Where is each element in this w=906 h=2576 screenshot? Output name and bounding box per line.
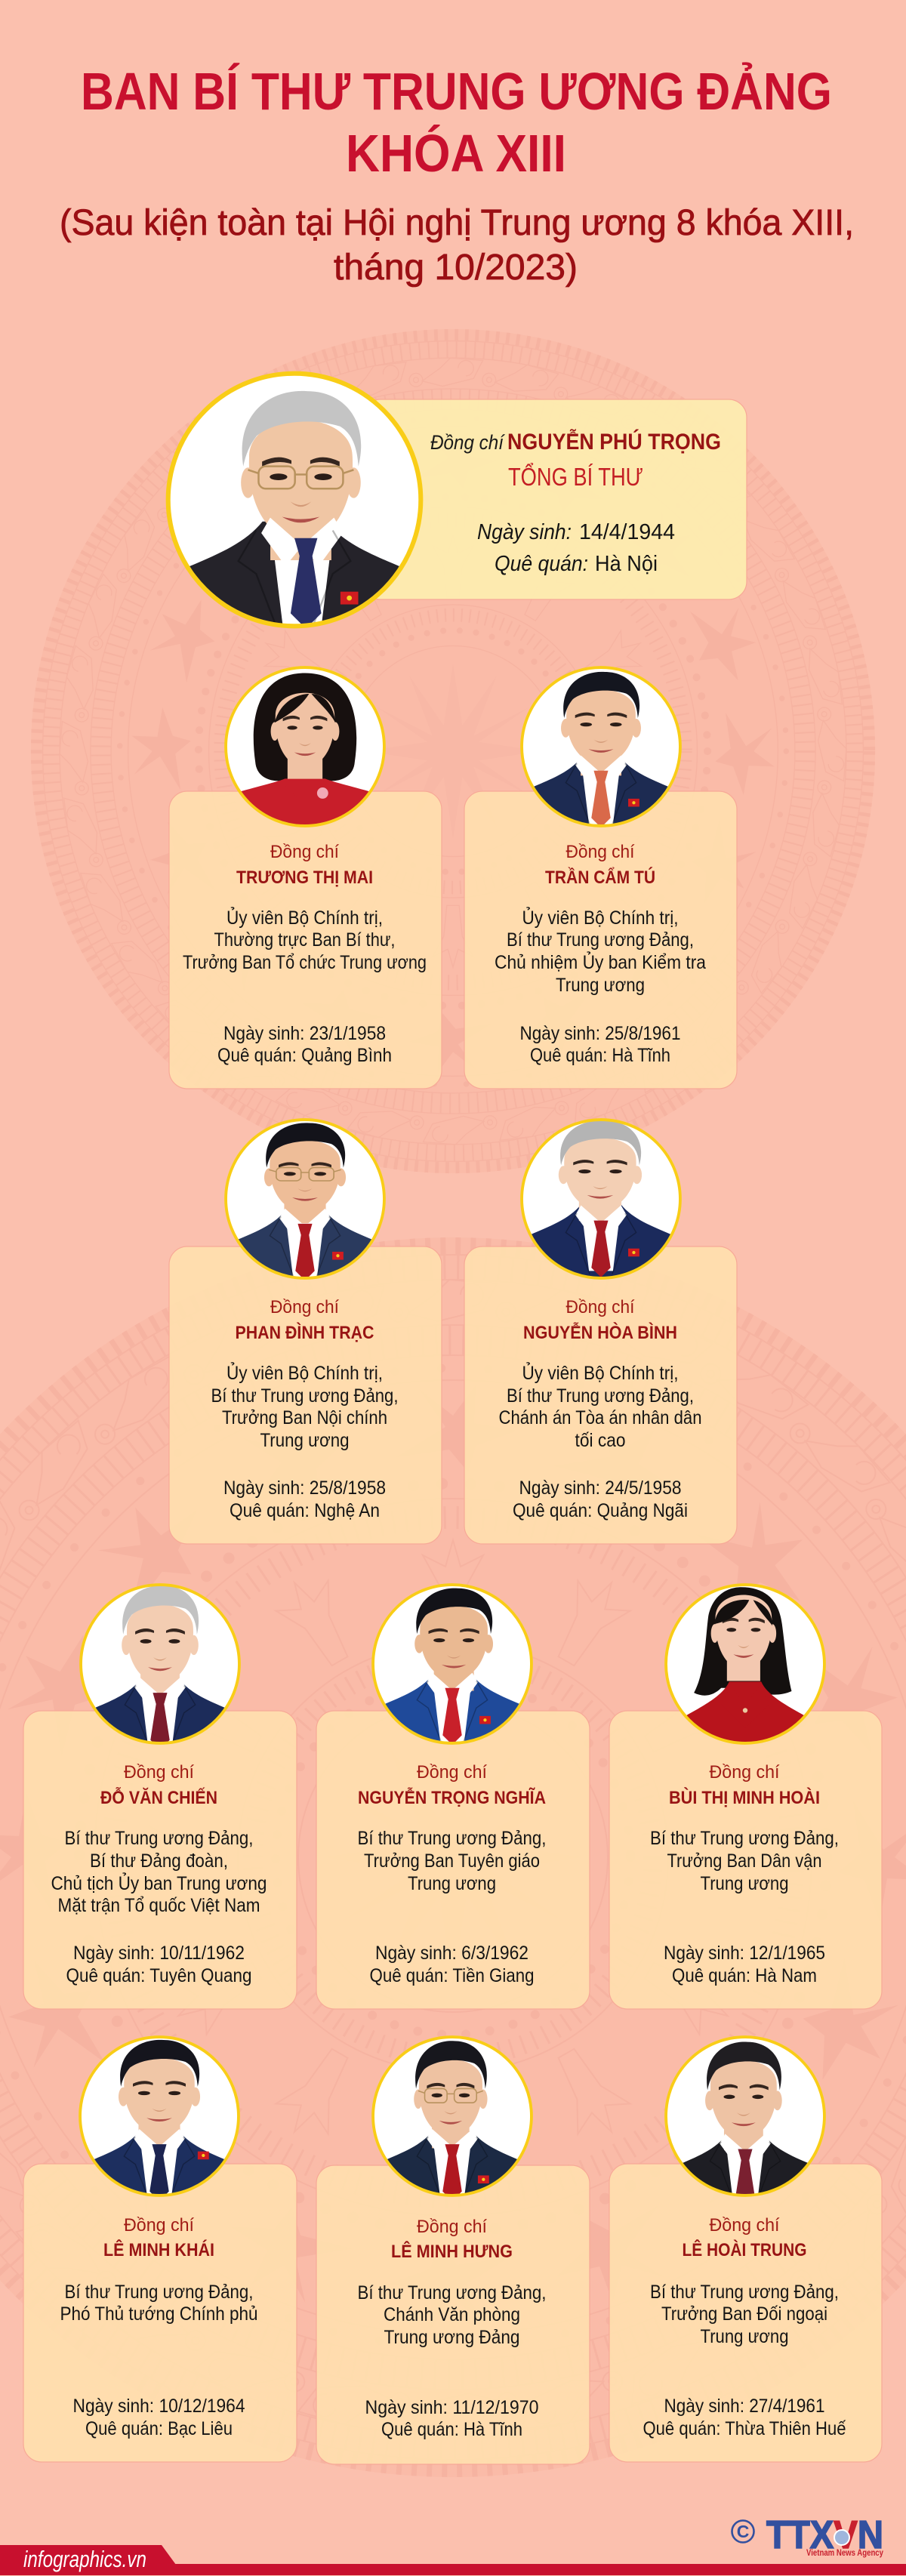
name and details: Quê quán:	[495, 552, 588, 576]
panel: Bùi Thị Minh Hoài	[609, 1585, 882, 2009]
details: Đồng chí	[270, 1297, 339, 1317]
details: Ủy viên Bộ Chính trị,	[226, 1361, 383, 1384]
subtitle: (Sau kiện toàn tại Hội nghị Trung ương 8 khóa XIII,	[60, 203, 854, 243]
details: Đồng chí	[124, 2215, 194, 2236]
portrait	[80, 1585, 240, 1755]
details: Ủy viên Bộ Chính trị,	[522, 1361, 678, 1384]
details	[495, 842, 706, 1066]
portrait	[665, 2037, 825, 2211]
details	[51, 1762, 267, 1986]
card	[609, 2164, 882, 2462]
details: NGUYỄN HÒA BÌNH	[523, 1321, 677, 1343]
logo: TTXVN: Vietnam News Agency	[806, 2549, 884, 2558]
details	[643, 2215, 846, 2439]
details	[183, 842, 427, 1066]
details: Đồng chí	[566, 1297, 635, 1317]
card	[169, 791, 442, 1089]
title: KHÓA XIII	[346, 124, 566, 183]
logo: TTXVN: TTXVN	[766, 2513, 883, 2557]
details: Ngày sinh: 10/11/1962	[73, 1943, 245, 1964]
footer band	[0, 2545, 906, 2575]
details: Trưởng Ban Dân vận	[667, 1850, 821, 1872]
details: Trung ương	[408, 1873, 496, 1894]
details: Quê quán: Hà Tĩnh	[381, 2419, 522, 2440]
name and details: NGUYỄN PHÚ TRỌNG	[507, 429, 721, 454]
details	[358, 2217, 547, 2440]
details: Chủ tịch Ủy ban Trung ương	[51, 1872, 267, 1894]
name and details: 14/4/1944	[579, 520, 675, 544]
details: Bí thư Trung ương Đảng,	[650, 2282, 839, 2303]
details: Ủy viên Bộ Chính trị,	[226, 906, 383, 929]
details: Thường trực Ban Bí thư,	[214, 929, 396, 951]
name and details: Ngày sinh:	[477, 520, 572, 544]
panel: Nguyễn Trọng Nghĩa	[316, 1585, 590, 2009]
details: Quê quán: Bạc Liêu	[85, 2418, 233, 2439]
details: Bí thư Trung ương Đảng,	[507, 1385, 694, 1407]
card	[464, 791, 737, 1089]
card	[316, 2165, 590, 2464]
card	[609, 1711, 882, 2009]
details: Ngày sinh: 25/8/1961	[519, 1023, 681, 1044]
details	[60, 2215, 258, 2439]
panel: Trương Thị Mai	[169, 667, 442, 1089]
panel: Lê Minh Hưng	[316, 2037, 590, 2464]
card	[23, 1711, 297, 2009]
details: Đồng chí	[417, 1762, 487, 1783]
card	[316, 1711, 590, 2009]
portrait	[225, 1120, 385, 1285]
panel: Lê Minh Khái	[23, 2037, 297, 2462]
details: Trưởng Ban Tổ chức Trung ương	[183, 952, 427, 973]
panel: Lê Hoài Trung	[609, 2037, 882, 2462]
details: Quê quán: Thừa Thiên Huế	[643, 2418, 846, 2439]
details: LÊ HOÀI TRUNG	[683, 2239, 806, 2260]
details: Ngày sinh: 27/4/1961	[664, 2396, 824, 2417]
details: Chánh án Tòa án nhân dân	[498, 1407, 702, 1428]
portrait	[521, 1120, 681, 1279]
details: LÊ MINH KHÁI	[103, 2239, 214, 2260]
details: Đồng chí	[710, 1762, 780, 1783]
details: Ủy viên Bộ Chính trị,	[522, 906, 678, 929]
details: Bí thư Trung ương Đảng,	[650, 1828, 839, 1849]
portrait	[372, 1585, 532, 1749]
details: Quê quán: Nghệ An	[230, 1500, 380, 1521]
card	[23, 2164, 297, 2462]
details: Ngày sinh: 12/1/1965	[664, 1943, 825, 1964]
details: Quê quán: Hà Tĩnh	[530, 1045, 670, 1066]
details: Mặt trận Tổ quốc Việt Nam	[57, 1895, 260, 1916]
card	[464, 1246, 737, 1544]
details: Phó Thủ tướng Chính phủ	[60, 2303, 258, 2325]
details: Trung ương	[556, 975, 645, 996]
details: NGUYỄN TRỌNG NGHĨA	[358, 1786, 546, 1808]
details: Bí thư Trung ương Đảng,	[358, 2282, 547, 2303]
portrait	[79, 2037, 239, 2206]
portrait	[665, 1585, 825, 1752]
details: Trưởng Ban Nội chính	[222, 1407, 387, 1428]
details: tối cao	[575, 1430, 625, 1451]
details: Bí thư Trung ương Đảng,	[211, 1385, 399, 1407]
details: Đồng chí	[566, 842, 635, 862]
details: Quê quán: Hà Nam	[672, 1965, 817, 1986]
title	[81, 62, 832, 183]
name and details: Hà Nội	[595, 552, 658, 576]
details: Quê quán: Quảng Ngãi	[513, 1500, 688, 1521]
panel: Phan Đình Trạc	[169, 1120, 442, 1544]
details	[498, 1297, 702, 1521]
details: Ngày sinh: 10/12/1964	[72, 2396, 245, 2417]
details: Bí thư Trung ương Đảng,	[358, 1828, 547, 1849]
details: Trung ương	[260, 1430, 349, 1451]
details: Trung ương	[701, 1873, 788, 1894]
details: Trung ương Đảng	[384, 2327, 519, 2348]
details: Trưởng Ban Đối ngoại	[661, 2303, 827, 2325]
portrait	[167, 374, 422, 640]
card	[169, 1246, 442, 1544]
details: Ngày sinh: 24/5/1958	[519, 1478, 681, 1499]
details: BÙI THỊ MINH HOÀI	[669, 1787, 820, 1808]
details: TRƯƠNG THỊ MAI	[236, 867, 373, 888]
details: Đồng chí	[270, 842, 339, 862]
portrait	[521, 667, 681, 832]
details: Quê quán: Tuyên Quang	[66, 1965, 252, 1986]
background drum bottom	[0, 1190, 906, 2525]
name and details: TỔNG BÍ THƯ	[508, 463, 643, 491]
portrait	[372, 2037, 532, 2206]
details: Đồng chí	[710, 2215, 780, 2236]
subtitle: tháng 10/2023)	[334, 248, 578, 288]
details: PHAN ĐÌNH TRẠC	[236, 1322, 374, 1343]
details	[358, 1762, 547, 1986]
subtitle	[60, 203, 854, 288]
details: Đồng chí	[417, 2217, 487, 2237]
details: Ngày sinh: 6/3/1962	[375, 1943, 528, 1964]
details: LÊ MINH HƯNG	[391, 2241, 513, 2262]
card	[362, 399, 747, 599]
details	[211, 1297, 399, 1521]
details	[650, 1762, 839, 1986]
details: Ngày sinh: 11/12/1970	[365, 2397, 539, 2418]
details: ĐỖ VĂN CHIẾN	[100, 1786, 217, 1808]
panel: Đỗ Văn Chiến	[23, 1585, 297, 2009]
details: Đồng chí	[124, 1762, 194, 1783]
details: Trưởng Ban Tuyên giáo	[364, 1850, 540, 1872]
details: Trung ương	[701, 2326, 788, 2347]
details: Chủ nhiệm Ủy ban Kiểm tra	[495, 951, 706, 973]
panel: Nguyễn Phú Trọng	[167, 374, 747, 640]
background drum top	[0, 297, 906, 1206]
name and details: Đồng chí	[430, 431, 505, 454]
details: Bí thư Trung ương Đảng,	[507, 929, 694, 951]
details: Bí thư Trung ương Đảng,	[65, 1828, 254, 1849]
details: Bí thư Trung ương Đảng,	[65, 2282, 254, 2303]
panel: Trần Cẩm Tú	[464, 667, 737, 1089]
footer band: infographics.vn	[23, 2546, 146, 2572]
details: Quê quán: Tiền Giang	[370, 1965, 535, 1986]
details: TRẦN CẨM TÚ	[545, 867, 655, 888]
details: Ngày sinh: 25/8/1958	[223, 1478, 386, 1499]
portrait	[225, 667, 385, 835]
name and details	[430, 429, 721, 576]
details: Bí thư Đảng đoàn,	[90, 1850, 228, 1872]
panel: Nguyễn Hòa Bình	[464, 1120, 737, 1544]
details: Quê quán: Quảng Bình	[217, 1045, 392, 1066]
details: Chánh Văn phòng	[384, 2304, 520, 2325]
details: Ngày sinh: 23/1/1958	[223, 1023, 386, 1044]
logo: TTXVN: C	[737, 2522, 749, 2541]
